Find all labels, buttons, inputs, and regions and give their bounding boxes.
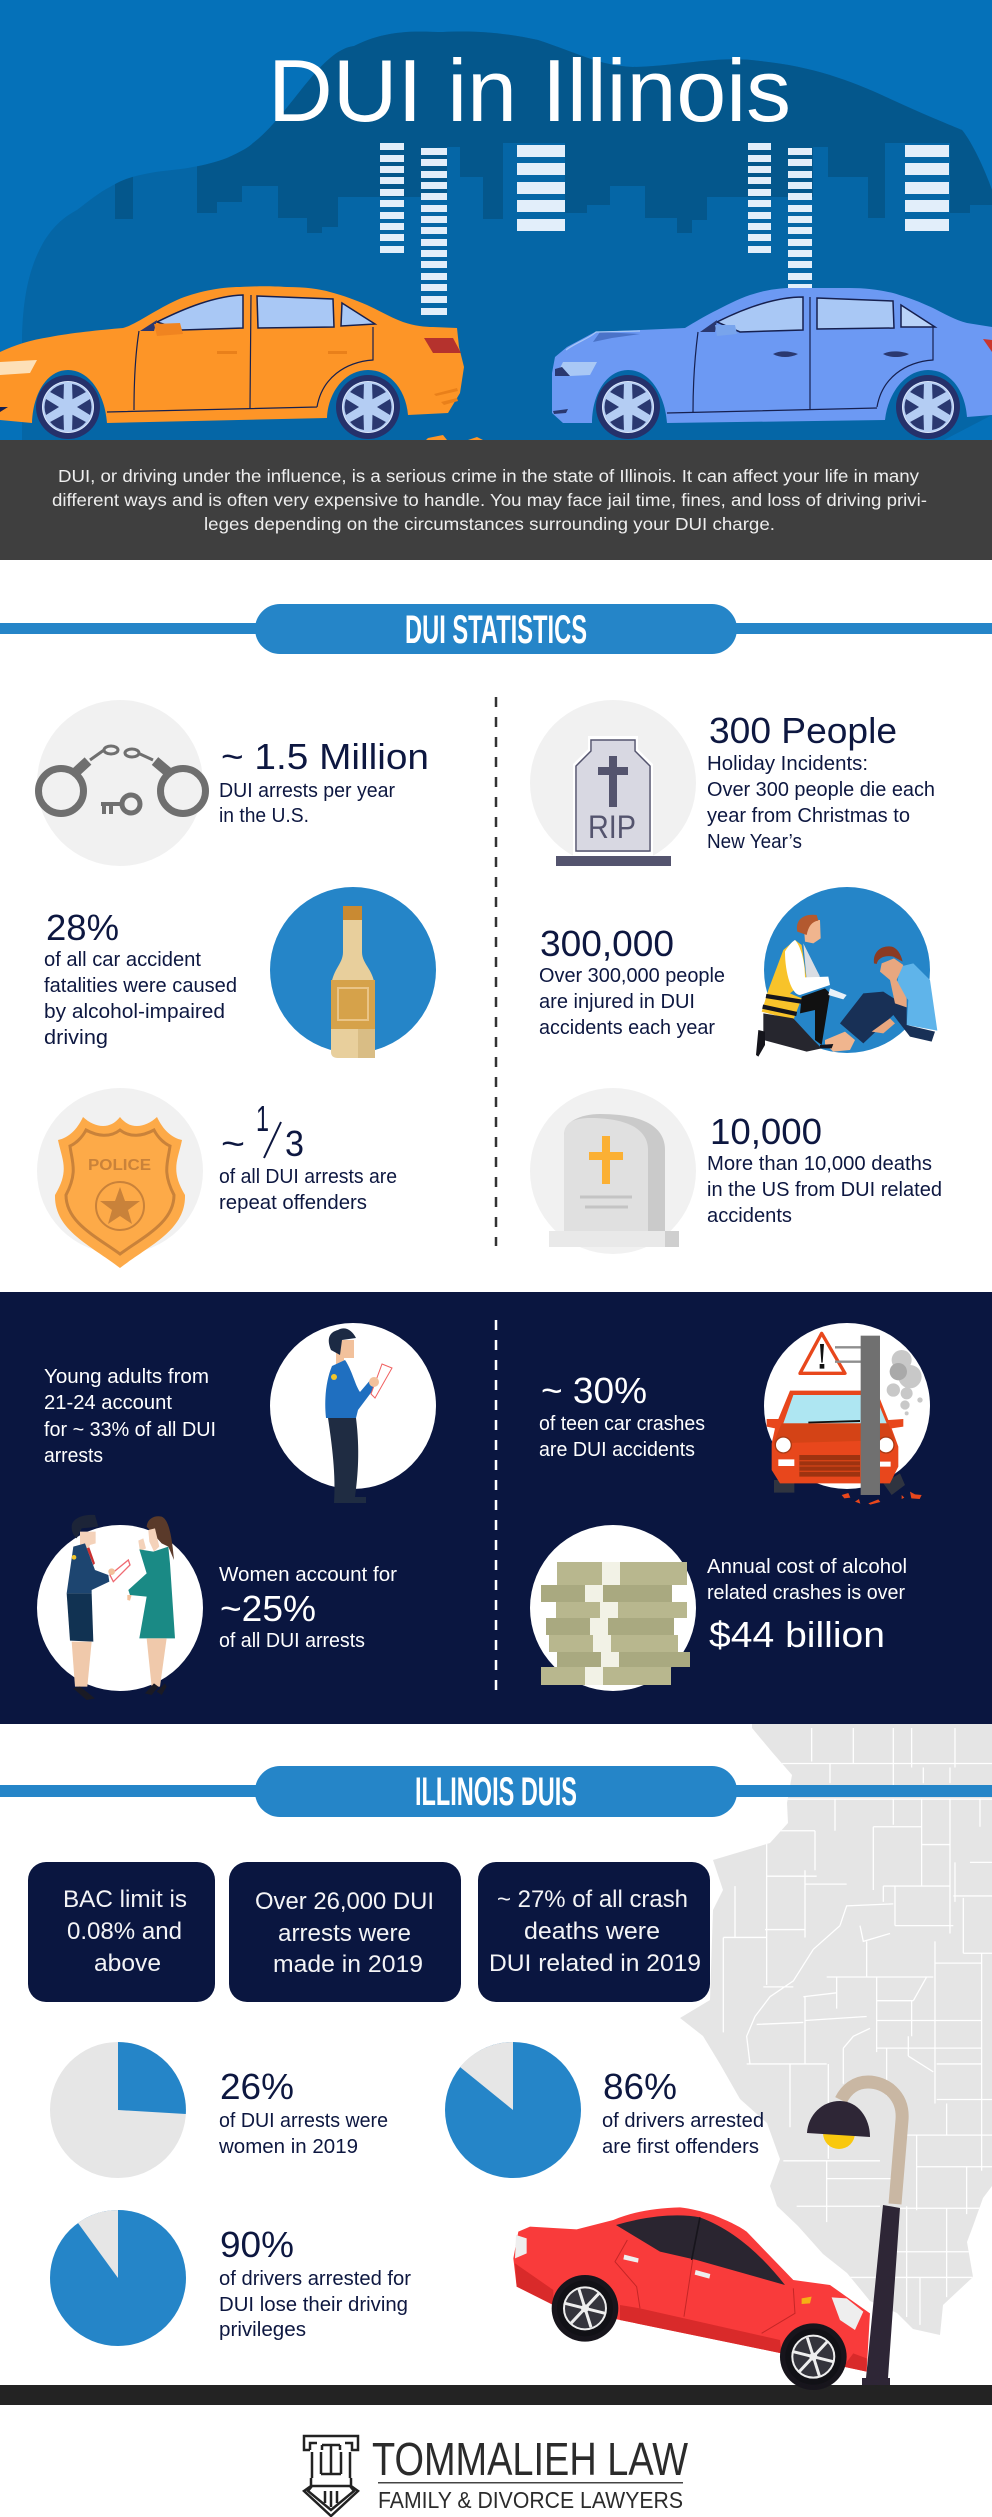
panel: navy statistics: [0, 1292, 992, 1724]
icon: crashed car: [767, 1333, 923, 1505]
stat: 10,000 deaths: 10,000: [710, 1111, 822, 1152]
intro text: DUI, or driving under the influence, is a serious crime in the state of Illinois. It can affect your life in many: [58, 466, 919, 486]
logo text: [372, 2433, 688, 2513]
icon: officer and woman: [67, 1515, 175, 1700]
icon: money stacks: [541, 1562, 690, 1685]
icon: police badge: POLICE: [88, 1157, 151, 1174]
pie chart: 90% lose privileges: DUI lose their driving: [219, 2294, 408, 2316]
stat: annual cost: $44 billion: [709, 1614, 885, 1655]
lamp post: [807, 2082, 902, 2385]
stat: 300 people holiday: Holiday Incidents:: [707, 753, 868, 775]
pie chart: 86% first offenders: [445, 2042, 764, 2178]
stat: 10,000 deaths: accidents: [707, 1205, 792, 1227]
stat: 28% fatalities: [44, 887, 436, 1058]
callout: BAC limit: 0.08% and: [67, 1918, 182, 1945]
pie chart: 90% lose privileges: 90%: [220, 2224, 294, 2265]
pie chart: 86% first offenders: 86%: [603, 2066, 677, 2107]
stat: one third repeat offenders: repeat offenders: [219, 1192, 367, 1214]
stat: 10,000 deaths: More than 10,000 deaths: [707, 1153, 932, 1175]
stat: 10,000 deaths: in the US from DUI related: [707, 1179, 942, 1201]
intro text: different ways and is often very expensive to handle. You may face jail time, fines, and loss of driving privi-: [52, 490, 927, 510]
callout: 26,000 arrests: [229, 1862, 461, 2002]
stat: teen crashes: are DUI accidents: [539, 1439, 695, 1461]
stat: teen crashes: of teen car crashes: [539, 1413, 705, 1435]
stat: women: [37, 1515, 397, 1700]
footer logo: [304, 2433, 688, 2516]
stat: annual cost: Annual cost of alcohol: [707, 1556, 907, 1578]
stat: 1.5 million arrests: DUI arrests per year: [219, 780, 395, 802]
map of Illinois: [670, 1724, 992, 2344]
pie chart: 90% lose privileges: of drivers arrested for: [219, 2268, 411, 2290]
pie chart: 90% lose privileges: [50, 2210, 411, 2346]
stat: young adults: [44, 1323, 436, 1503]
logo text: TOMMALIEH LAW: [372, 2433, 688, 2485]
icon: RIP gravestone: [556, 738, 671, 866]
callout: BAC limit: above: [94, 1950, 161, 1977]
stat: 300,000 injured: [539, 887, 937, 1057]
pie chart: 86% first offenders: of drivers arrested: [602, 2110, 764, 2132]
stat: teen crashes: [539, 1323, 930, 1505]
stat: annual cost: related crashes is over: [707, 1582, 905, 1604]
callout: 27% of deaths: DUI related in 2019: [489, 1950, 701, 1977]
stat: 300 people holiday: 300 People: [709, 710, 897, 751]
heading: Illinois DUIs: ILLINOIS DUIS: [415, 1770, 577, 1814]
callout: BAC limit: [28, 1862, 215, 2002]
intro panel: [0, 440, 992, 560]
blue car: [552, 288, 992, 439]
road: [0, 2385, 992, 2405]
stat: 300,000 injured: are injured in DUI: [539, 991, 695, 1013]
stat: 300 people holiday: Over 300 people die each: [707, 779, 935, 801]
icon: bottle: [331, 906, 375, 1058]
city silhouette: [0, 0, 992, 440]
pie chart: 26% women: of DUI arrests were: [219, 2110, 388, 2132]
icon: police badge: [55, 1117, 185, 1268]
heading: DUI statistics: [0, 604, 992, 654]
hero illustration: [0, 0, 992, 440]
stat: 300 people holiday: [530, 700, 935, 866]
intro text: leges depending on the circumstances surrounding your DUI charge.: [204, 514, 775, 534]
stat: 1.5 million arrests: ~ 1.5 Million: [221, 736, 429, 777]
stat fraction: [221, 1098, 304, 1164]
stat: 1.5 million arrests: [37, 700, 429, 866]
callout: BAC limit: BAC limit is: [63, 1886, 187, 1913]
icon: medic and injured person: [756, 915, 937, 1057]
logo text: FAMILY & DIVORCE LAWYERS: [378, 2487, 683, 2513]
stat: 300 people holiday: New Year’s: [707, 831, 802, 853]
stat: 300,000 injured: 300,000: [540, 923, 674, 964]
icon: police officer: [325, 1328, 392, 1503]
pie chart: 26% women: [50, 2042, 388, 2178]
title: DUI in Illinois: [268, 41, 791, 140]
stat: young adults: arrests: [44, 1445, 103, 1467]
stat fraction: ~: [221, 1123, 245, 1164]
pie chart: 26% women: 26%: [220, 2066, 294, 2107]
stat: young adults: for ~ 33% of all DUI: [44, 1419, 216, 1441]
illustration: car crashed into lamp post: [513, 2082, 902, 2390]
orange car: [0, 286, 483, 440]
stat: 300,000 injured: accidents each year: [539, 1017, 715, 1039]
stat: 300 people holiday: year from Christmas to: [707, 805, 910, 827]
building windows: [380, 143, 949, 315]
stat: 1.5 million arrests: in the U.S.: [219, 805, 309, 827]
stat fraction: 3: [285, 1123, 304, 1164]
icon: gravestone with cross: [549, 1114, 679, 1247]
icon: handcuffs: [38, 746, 206, 814]
stat: women: ~25%: [220, 1588, 316, 1629]
stat: 28% fatalities: driving: [44, 1027, 108, 1049]
callout: 26,000 arrests: Over 26,000 DUI: [255, 1888, 434, 1915]
callout: 26,000 arrests: arrests were: [278, 1920, 411, 1947]
heading: DUI statistics: DUI STATISTICS: [405, 608, 587, 652]
stat: 10,000 deaths: [530, 1088, 942, 1254]
stat: women: Women account for: [219, 1564, 397, 1586]
heading: Illinois DUIs: [0, 1766, 992, 1817]
stat: 28% fatalities: 28%: [46, 907, 119, 948]
stat: 300,000 injured: Over 300,000 people: [539, 965, 725, 987]
stat: young adults: 21-24 account: [44, 1392, 172, 1414]
pie chart: 26% women: women in 2019: [218, 2136, 358, 2158]
red car: [513, 2207, 870, 2390]
stat: young adults: Young adults from: [44, 1366, 209, 1388]
pie chart: 90% lose privileges: privileges: [219, 2319, 306, 2341]
stat fraction: 1: [256, 1098, 269, 1139]
callout: 27% of deaths: deaths were: [524, 1918, 660, 1945]
callout: 26,000 arrests: made in 2019: [273, 1951, 423, 1978]
stat: one third repeat offenders: [37, 1088, 397, 1268]
intro text: [52, 466, 927, 534]
icon: law firm pillar shield: [304, 2436, 358, 2516]
icon: RIP gravestone: RIP: [588, 809, 636, 845]
stat: teen crashes: ~ 30%: [541, 1370, 647, 1411]
stat: 28% fatalities: fatalities were caused: [44, 975, 237, 997]
stat: annual cost: [530, 1525, 907, 1691]
pie chart: 86% first offenders: are first offenders: [602, 2136, 759, 2158]
callout: 27% of deaths: ~ 27% of all crash: [497, 1886, 688, 1913]
stat: women: of all DUI arrests: [219, 1630, 365, 1652]
stat: 28% fatalities: by alcohol-impaired: [44, 1001, 225, 1023]
callout: 27% of deaths: [478, 1862, 710, 2002]
stat: one third repeat offenders: of all DUI arrests are: [219, 1166, 397, 1188]
stat: 28% fatalities: of all car accident: [44, 949, 201, 971]
